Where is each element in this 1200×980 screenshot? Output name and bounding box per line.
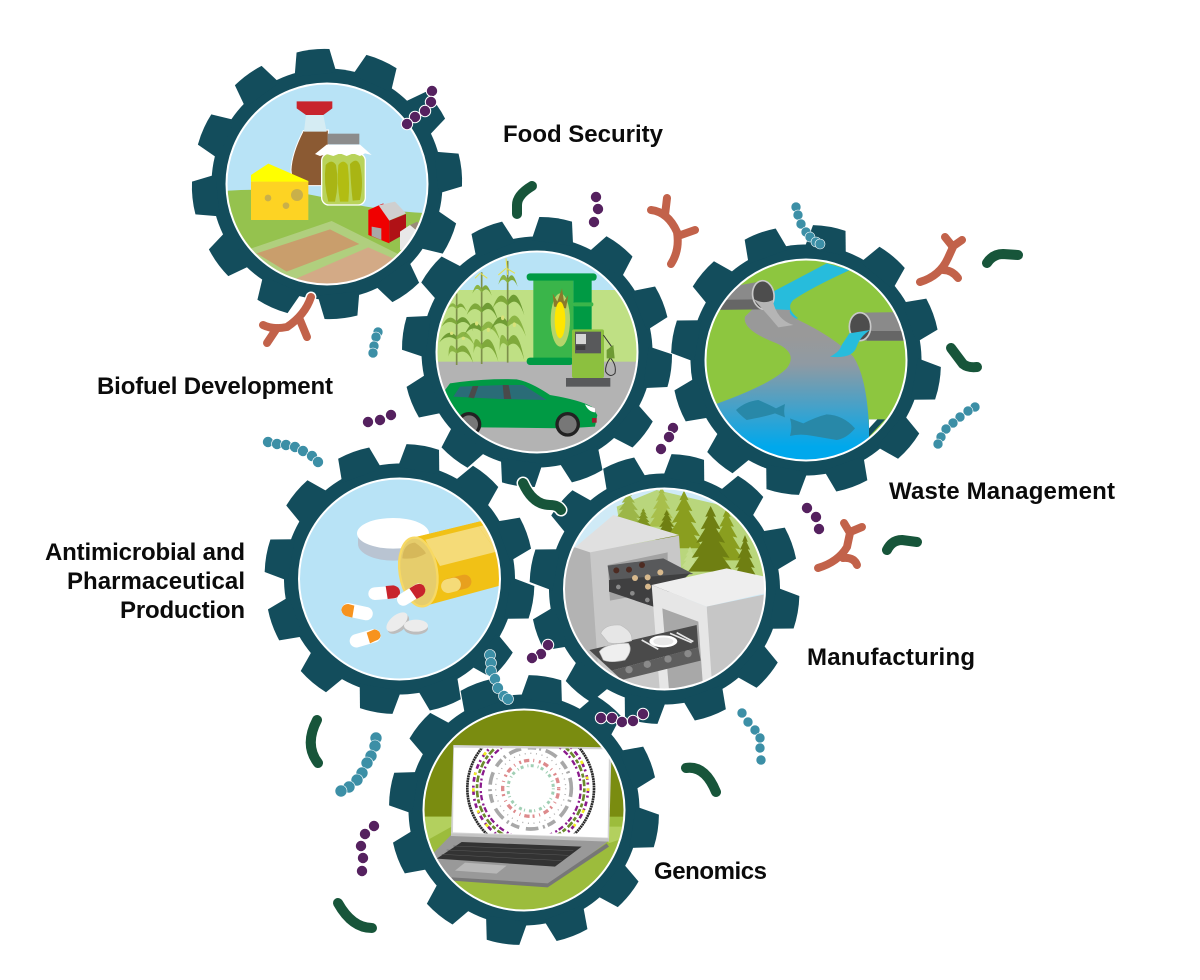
label: Antimicrobial and Pharmaceutical Production: Pharmaceutical bbox=[67, 568, 245, 595]
icon: laptop screen bbox=[451, 745, 612, 839]
scene: waste water river bbox=[703, 258, 910, 465]
scene: factory bbox=[562, 487, 770, 697]
label: Antimicrobial and Pharmaceutical Production: Production bbox=[120, 597, 245, 624]
icon: fish bbox=[736, 400, 855, 440]
scene: laptop with genome plot bbox=[422, 708, 628, 917]
icon: laptop keyboard base bbox=[430, 833, 609, 887]
gear: antimicrobial and pharmaceutical production bbox=[264, 444, 534, 714]
microbes: green rod bacteria bbox=[311, 186, 1018, 928]
icon: large tablet bbox=[357, 518, 429, 561]
icon: right outflow pipe bbox=[830, 312, 910, 357]
icon: cheese wedge bbox=[251, 164, 308, 220]
label: Manufacturing: Manufacturing bbox=[807, 644, 975, 671]
gear: food security bbox=[192, 48, 462, 320]
label: Biofuel Development: Biofuel Development bbox=[97, 373, 333, 400]
icon: spilled pill bottle bbox=[398, 521, 499, 608]
microbes: purple cocci chains bbox=[355, 85, 825, 877]
gear: manufacturing bbox=[530, 454, 800, 724]
icon: biofuel tank bbox=[527, 273, 597, 365]
label: Food Security: Food Security bbox=[503, 121, 664, 148]
icon: right packing machine bbox=[652, 568, 770, 693]
label: Genomics: Genomics bbox=[654, 858, 767, 885]
gear: biofuel development bbox=[402, 217, 672, 487]
label: Waste Management: Waste Management bbox=[889, 478, 1115, 505]
scene: biofuel bbox=[433, 250, 640, 457]
icon: left oven machine bbox=[565, 515, 694, 688]
scene: pills bbox=[297, 477, 508, 683]
scene: food security bbox=[228, 84, 426, 284]
icon: red and white capsules bbox=[368, 584, 426, 606]
icon: pickle jar bbox=[315, 134, 372, 205]
microbes: brown branched bacteria bbox=[263, 198, 962, 568]
icon: soy sauce bottle bbox=[291, 101, 332, 186]
icon: left outflow pipe bbox=[720, 280, 793, 328]
label: Antimicrobial and Pharmaceutical Production: Antimicrobial and bbox=[45, 539, 245, 566]
icon: green car bbox=[440, 379, 597, 437]
icon: orange and white capsules bbox=[341, 603, 381, 648]
gear: genomics bbox=[389, 675, 659, 945]
icon: corn plants bbox=[439, 258, 526, 365]
chart: circular genome plot bbox=[466, 748, 596, 834]
icon: red barn bbox=[368, 202, 422, 250]
label: Antimicrobial and Pharmaceutical Production bbox=[45, 539, 245, 624]
icon: fuel pump bbox=[566, 329, 615, 387]
icon: forest bbox=[613, 487, 757, 577]
icon: small white tablets bbox=[386, 612, 428, 635]
icon: conveyor belt with dish bbox=[589, 625, 701, 680]
microbes: teal cocci chains bbox=[262, 202, 980, 797]
gear: waste management bbox=[671, 225, 941, 495]
